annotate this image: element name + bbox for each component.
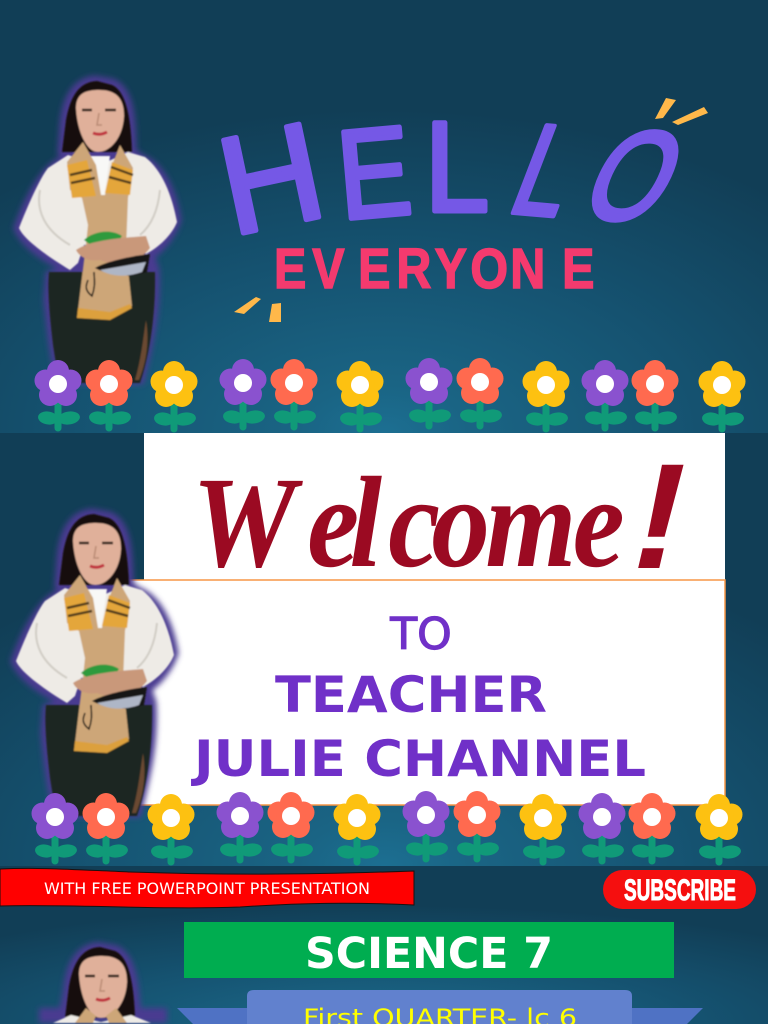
letter L: L bbox=[425, 95, 489, 238]
exclamation mark: ! bbox=[617, 433, 705, 601]
sparkles: bottom left bbox=[234, 297, 281, 322]
ribbon centre bbox=[247, 990, 632, 1024]
title text: SCIENCE 7 bbox=[305, 929, 553, 979]
flower row 1 bbox=[34, 358, 746, 429]
slide 2: welcome bbox=[0, 433, 768, 866]
banner: free powerpoint bbox=[0, 868, 414, 908]
green title bar bbox=[184, 922, 674, 978]
panel: science 7 bbox=[184, 922, 674, 979]
letter E: E bbox=[332, 100, 416, 246]
red wavy banner bbox=[0, 868, 414, 908]
ribbon: first quarter bbox=[177, 990, 703, 1024]
welcome word: Welcome bbox=[192, 450, 625, 594]
heading: EVERYONE: EVERYONE bbox=[274, 237, 594, 301]
red pill bbox=[603, 870, 756, 909]
slide 1: hello everyone bbox=[0, 0, 768, 433]
slide 3: science 7 bbox=[0, 866, 768, 1024]
photo: teacher bbox=[15, 513, 174, 816]
slide 3 background bbox=[0, 866, 768, 1024]
letter H: H bbox=[206, 93, 336, 265]
slide 1 background bbox=[0, 0, 768, 433]
slide 2 background bbox=[0, 433, 768, 866]
white welcome panel bbox=[144, 433, 725, 581]
letter O: O bbox=[564, 104, 707, 248]
heading: HELLO bbox=[206, 93, 707, 265]
photo: teacher bbox=[43, 946, 163, 1023]
button: subscribe bbox=[603, 870, 756, 909]
ribbon wings bbox=[177, 1008, 703, 1024]
panel: welcome lettering bbox=[144, 433, 725, 601]
second letter L: L bbox=[495, 98, 601, 243]
flower row 2 bbox=[32, 791, 742, 862]
text: TEACHER: TEACHER bbox=[275, 666, 547, 724]
text: JULIE CHANNEL: JULIE CHANNEL bbox=[191, 730, 646, 788]
photo: teacher bbox=[18, 80, 177, 383]
banner text: WITH FREE POWERPOINT PRESENTATION bbox=[44, 879, 370, 898]
sparkles: top right bbox=[655, 98, 708, 125]
text: TO: TO bbox=[389, 609, 452, 660]
panel: channel name bbox=[130, 580, 725, 805]
